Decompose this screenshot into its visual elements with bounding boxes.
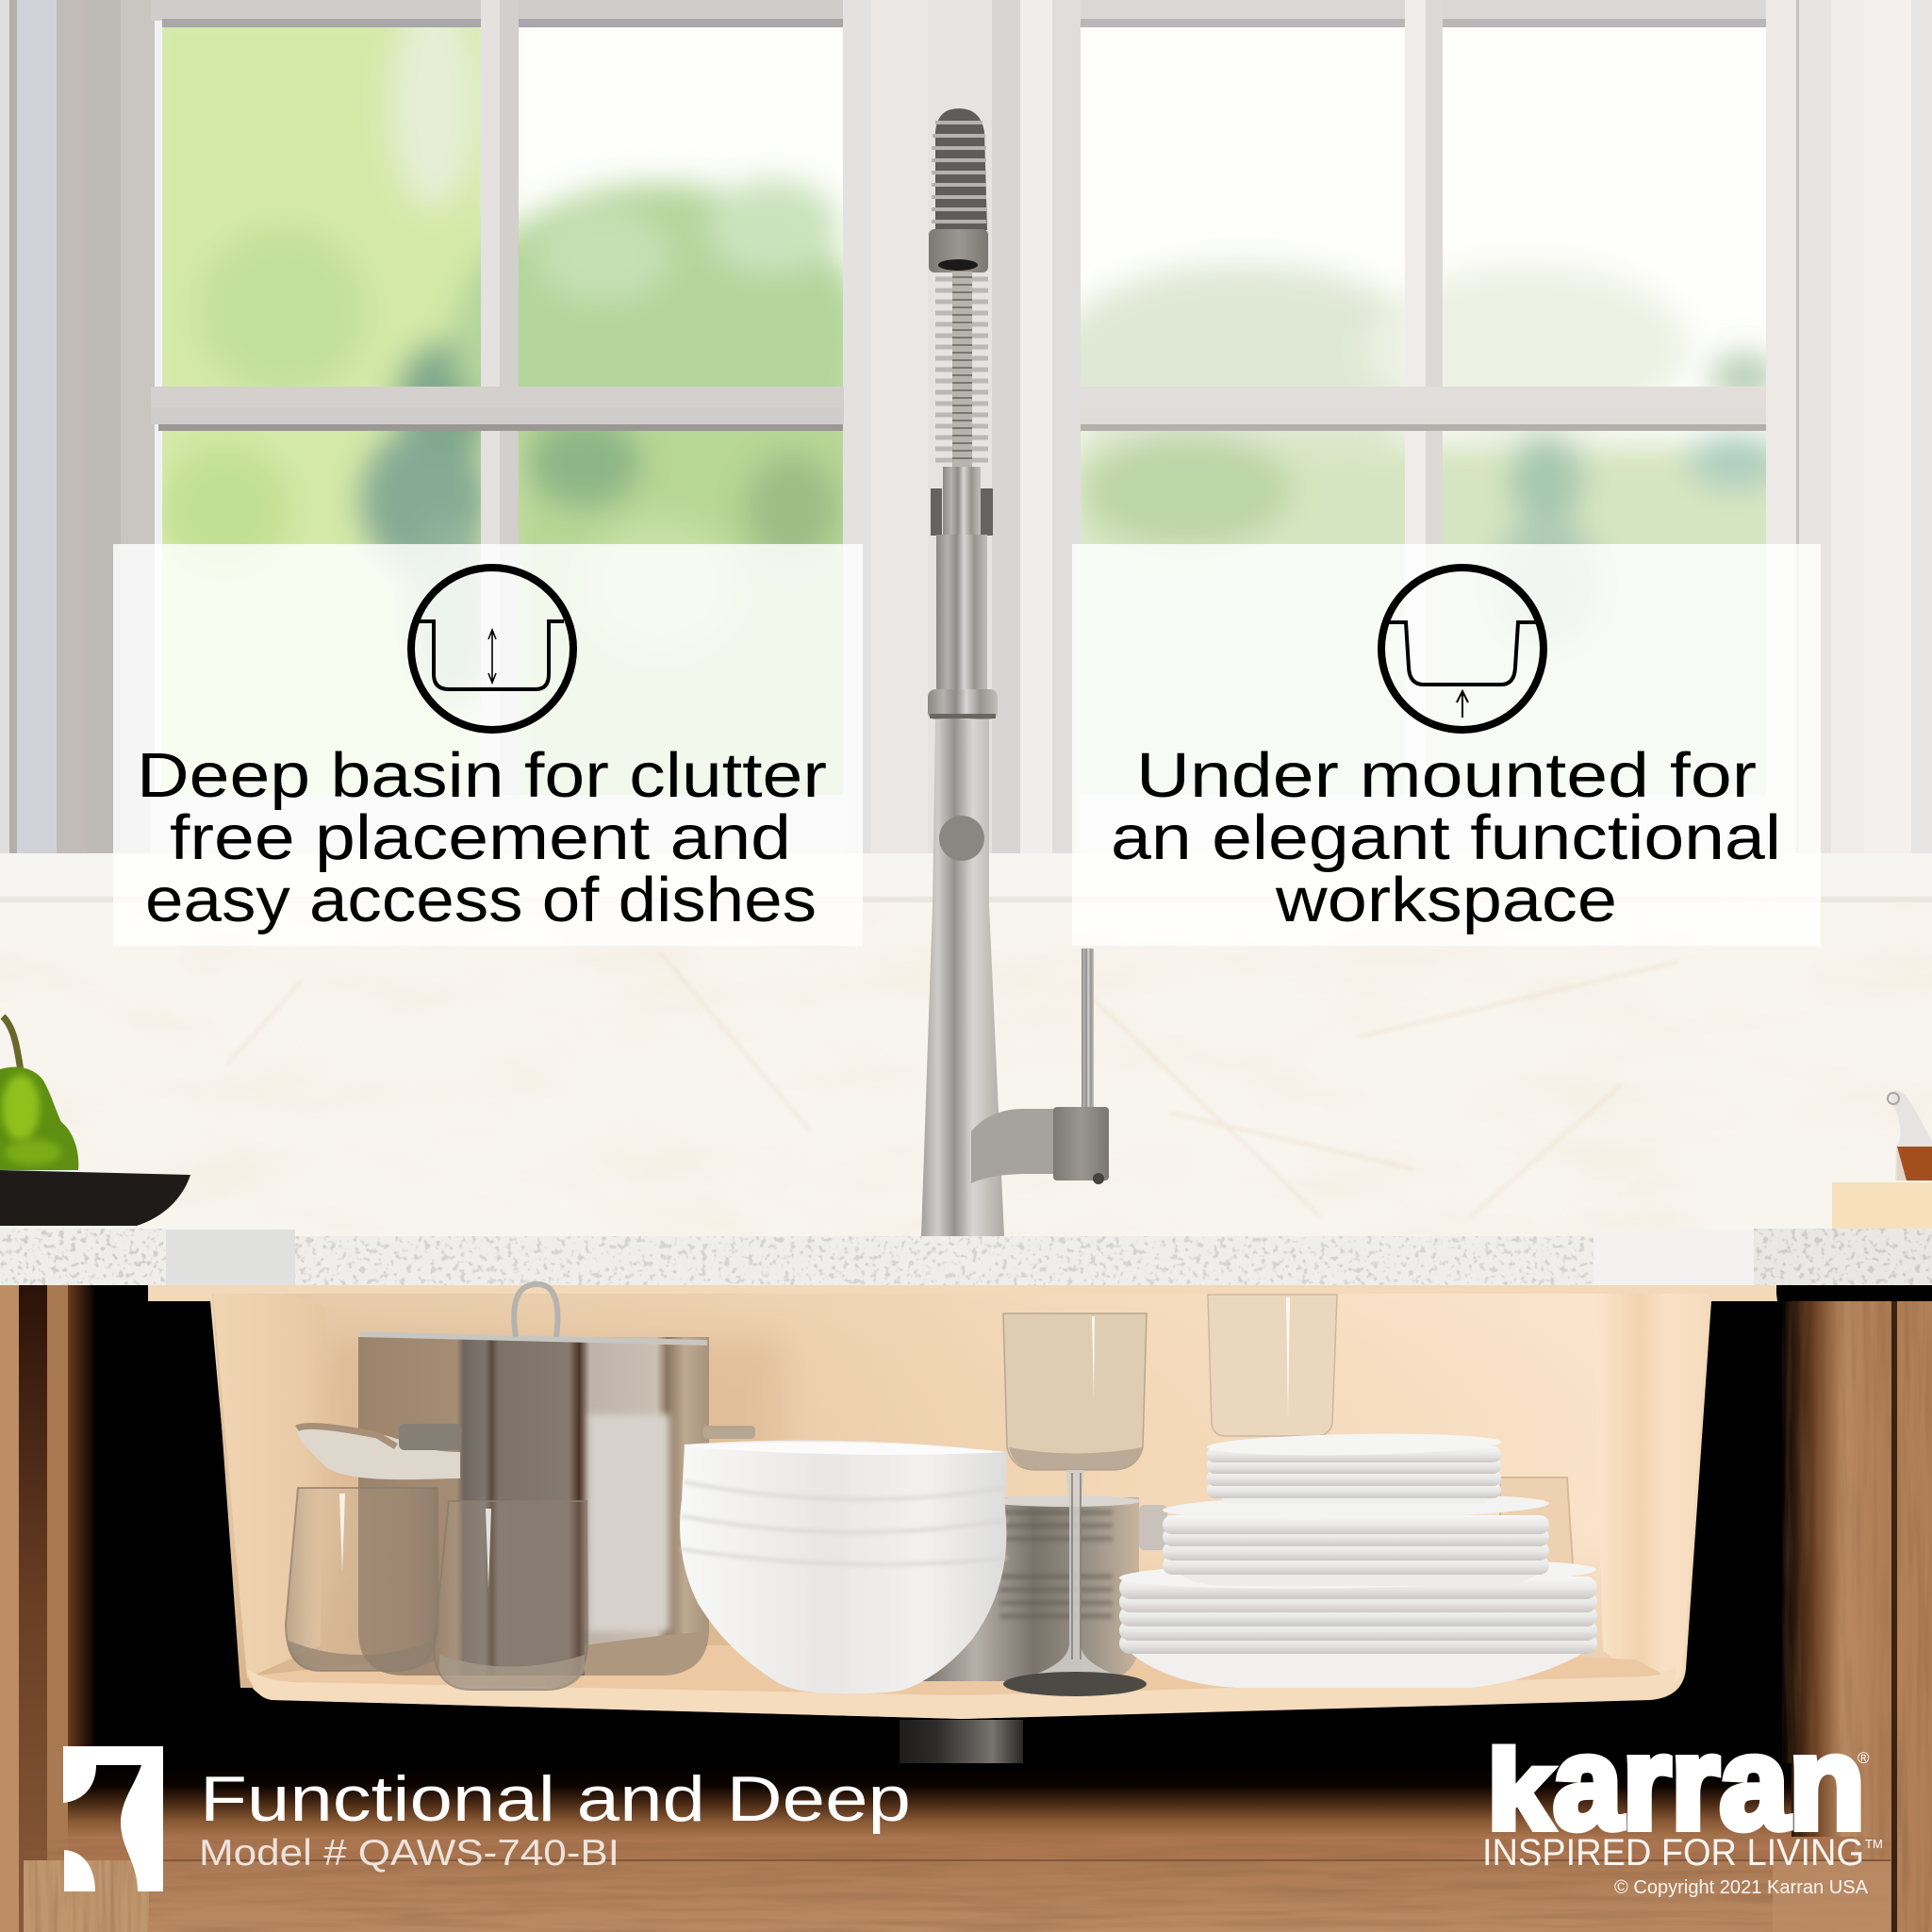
dark bowl [0, 1170, 190, 1226]
small plates [1207, 1431, 1501, 1504]
window sill [0, 853, 1932, 903]
rim and outer walls [148, 1285, 1777, 1719]
right pot handle [702, 1426, 755, 1439]
text: deep basin: Deep basin for clutter [137, 740, 827, 811]
stockpot [297, 1284, 755, 1676]
icon: deep basin [411, 568, 573, 730]
left cabinet frame [0, 1285, 94, 1932]
lid handle [514, 1284, 557, 1337]
small saucepan [905, 1495, 1167, 1681]
basin floor [247, 1645, 1674, 1714]
tagline: INSPIRED FOR LIVING [1482, 1832, 1864, 1874]
pear [0, 1016, 78, 1170]
counter right slab [1754, 1229, 1932, 1285]
stack of white bowls [680, 1441, 1007, 1693]
large plates [1119, 1556, 1597, 1688]
right inner wall [1593, 1294, 1709, 1690]
medium plates [1163, 1491, 1549, 1586]
oil bottle and cutting board [1832, 1090, 1932, 1230]
panel: deep basin [113, 544, 863, 946]
back wall shadow by pot [330, 1339, 783, 1650]
text: under mounted: an elegant functional [1111, 802, 1781, 873]
text: deep basin: easy access of dishes [145, 865, 817, 935]
drinking glass right [434, 1501, 587, 1690]
text: under mounted: Under mounted for [1136, 740, 1757, 811]
back wall [212, 1294, 1641, 1688]
icon arrow: depth [488, 630, 496, 683]
window glass with blurred trees [162, 27, 1766, 795]
counter left slab [0, 1229, 166, 1285]
pear and dark bowl [0, 1016, 190, 1226]
left inner wall [213, 1294, 326, 1678]
tumbler on plates [1208, 1295, 1337, 1436]
faucet spring [935, 272, 988, 468]
oil bottle [1888, 1090, 1932, 1181]
model number: Model # QAWS-740-BI [199, 1833, 619, 1874]
cutting board [1832, 1182, 1932, 1230]
trademark: TM [1865, 1837, 1883, 1851]
right window mullions [1081, 0, 1766, 853]
counter smooth left [166, 1230, 295, 1285]
faucet body [921, 719, 1004, 1236]
cabinet and black interior [0, 1285, 1932, 1932]
window wall background [0, 0, 1932, 905]
drain [900, 1720, 1023, 1792]
lower drawer front [24, 1763, 1891, 1932]
left window trees [162, 27, 843, 795]
pot lid rim [360, 1334, 707, 1343]
countertop [0, 1229, 1932, 1285]
logo: R mark [63, 1746, 163, 1891]
copyright: © Copyright 2021 Karran USA [1614, 1877, 1869, 1898]
text: deep basin: free placement and [170, 802, 791, 873]
sink basin [148, 1285, 1777, 1719]
logo: Karran [1482, 1709, 1883, 1874]
counter middle [295, 1236, 1593, 1285]
right window trees [1081, 253, 1766, 795]
panel: under mounted [1072, 544, 1821, 946]
drinking glass left [286, 1488, 438, 1671]
registered mark: ® [1858, 1749, 1870, 1767]
marble backsplash [0, 902, 1932, 1242]
left pot handle [297, 1425, 460, 1479]
front lip [247, 1665, 1676, 1719]
right cabinet frame [1782, 1301, 1932, 1932]
title: Functional and Deep [200, 1763, 911, 1835]
faucet [921, 108, 1109, 1236]
faucet ball joint [939, 816, 984, 861]
faded glass behind plates [1500, 1478, 1573, 1565]
text: under mounted: workspace [1275, 865, 1617, 935]
brand wordmark: arran [1553, 1709, 1865, 1857]
icon arrow: up [1457, 691, 1468, 718]
icon: under mounted basin [1381, 568, 1544, 730]
faucet sleeve [928, 467, 998, 719]
left window mullions [151, 0, 844, 853]
wine glass [1003, 1313, 1147, 1696]
counter smooth right [1593, 1230, 1754, 1285]
faucet spray head [929, 108, 988, 272]
pot body [358, 1337, 709, 1676]
stack of plates [1119, 1431, 1597, 1688]
brand wordmark: k [1488, 1728, 1552, 1853]
faucet lever [971, 949, 1109, 1184]
